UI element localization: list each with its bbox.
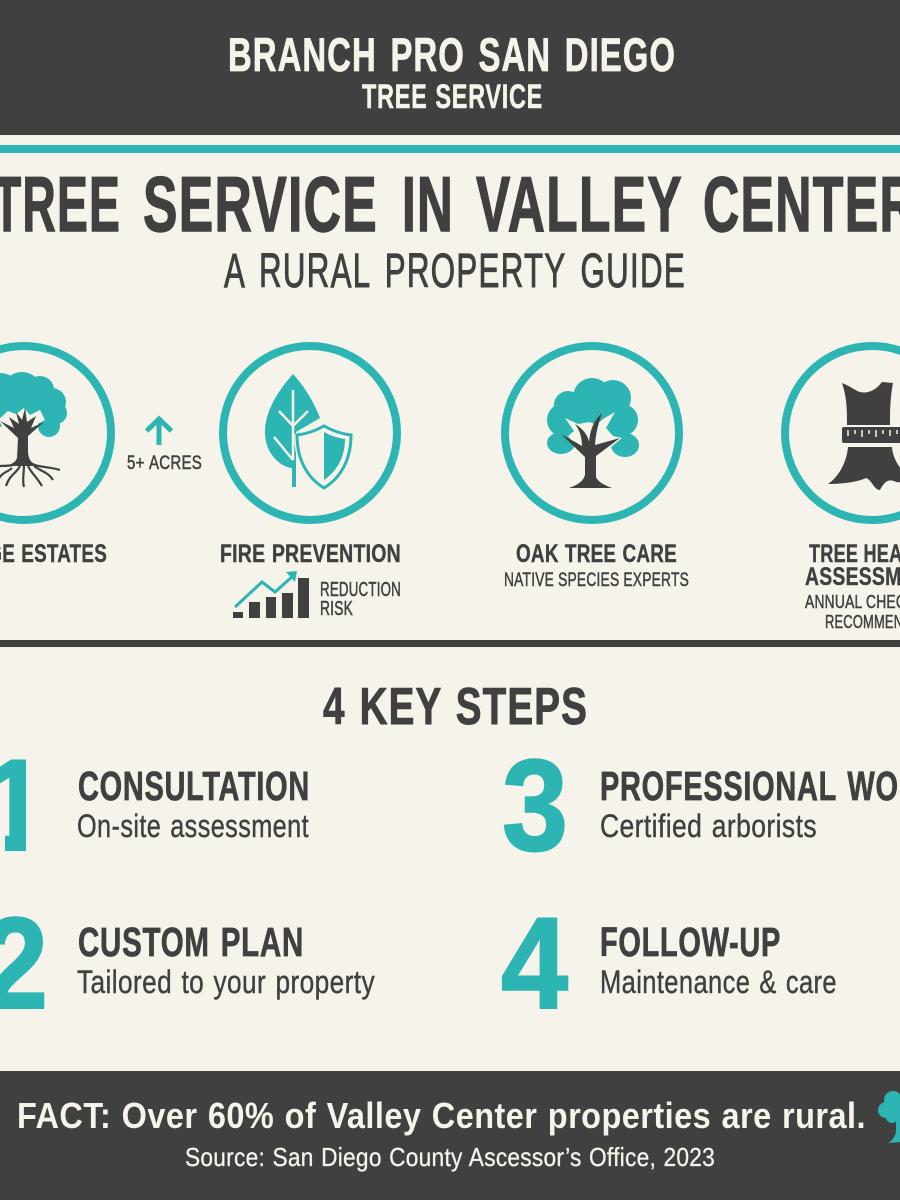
text: reduction risk: RISK <box>320 598 353 620</box>
step 2 heading: CUSTOM PLAN <box>78 919 304 965</box>
text: annual checks, recommendations <box>805 592 900 632</box>
step 3 <box>502 732 900 878</box>
panel: tree health assessment <box>785 346 900 632</box>
heading: 4 key steps: 4 KEY STEPS <box>323 678 588 736</box>
callout: 5+ acres: 5+ ACRES <box>127 453 202 474</box>
step 1 heading: CONSULTATION <box>78 763 310 809</box>
chart: risk reduction bars <box>233 571 309 618</box>
icon: leaf and shield <box>223 346 397 520</box>
header band: BRANCH PRO SAN DIEGO <box>228 28 676 81</box>
step 4 <box>501 890 837 1036</box>
number 4: 4 <box>501 890 568 1036</box>
icon: up arrow <box>146 419 172 445</box>
divider <box>0 640 900 647</box>
header band <box>0 0 900 135</box>
footer band <box>0 1071 900 1200</box>
title: SERVICE <box>143 160 378 248</box>
icon: measured trunk <box>785 346 900 520</box>
label: tree health assessment <box>805 540 900 591</box>
teal rule <box>0 145 900 153</box>
icon: tree with roots <box>0 346 111 520</box>
header band: TREE SERVICE <box>362 78 543 116</box>
callout: 5+ acres <box>127 419 202 474</box>
source text: Source: San Diego County Ascessor’s Office, 2023 <box>185 1142 715 1172</box>
icon: oak tree <box>505 346 679 520</box>
panel: fire prevention <box>220 346 401 620</box>
step 2 <box>0 890 375 1036</box>
step 2 text: Tailored to your property <box>77 964 375 1000</box>
text: reduction risk: REDUCTION <box>320 579 401 601</box>
title <box>0 160 900 248</box>
step 1 <box>0 760 309 851</box>
text: native species experts: NATIVE SPECIES EXPERTS <box>504 570 689 591</box>
step 3 text: Certified arborists <box>600 808 817 844</box>
label: fire prevention: FIRE PREVENTION <box>220 540 401 568</box>
panel: large estates <box>0 346 111 568</box>
icon: small tree <box>878 1091 900 1143</box>
title: IN <box>402 160 454 248</box>
number 3: 3 <box>502 732 568 878</box>
panel: oak tree care <box>504 346 689 591</box>
step 4 heading: FOLLOW-UP <box>600 919 781 965</box>
label: oak tree care: OAK TREE CARE <box>516 540 677 568</box>
step 4 text: Maintenance & care <box>600 964 837 1000</box>
title: VALLEY <box>476 160 683 248</box>
text: reduction risk <box>320 579 401 620</box>
step 1 text: On-site assessment <box>77 808 309 844</box>
